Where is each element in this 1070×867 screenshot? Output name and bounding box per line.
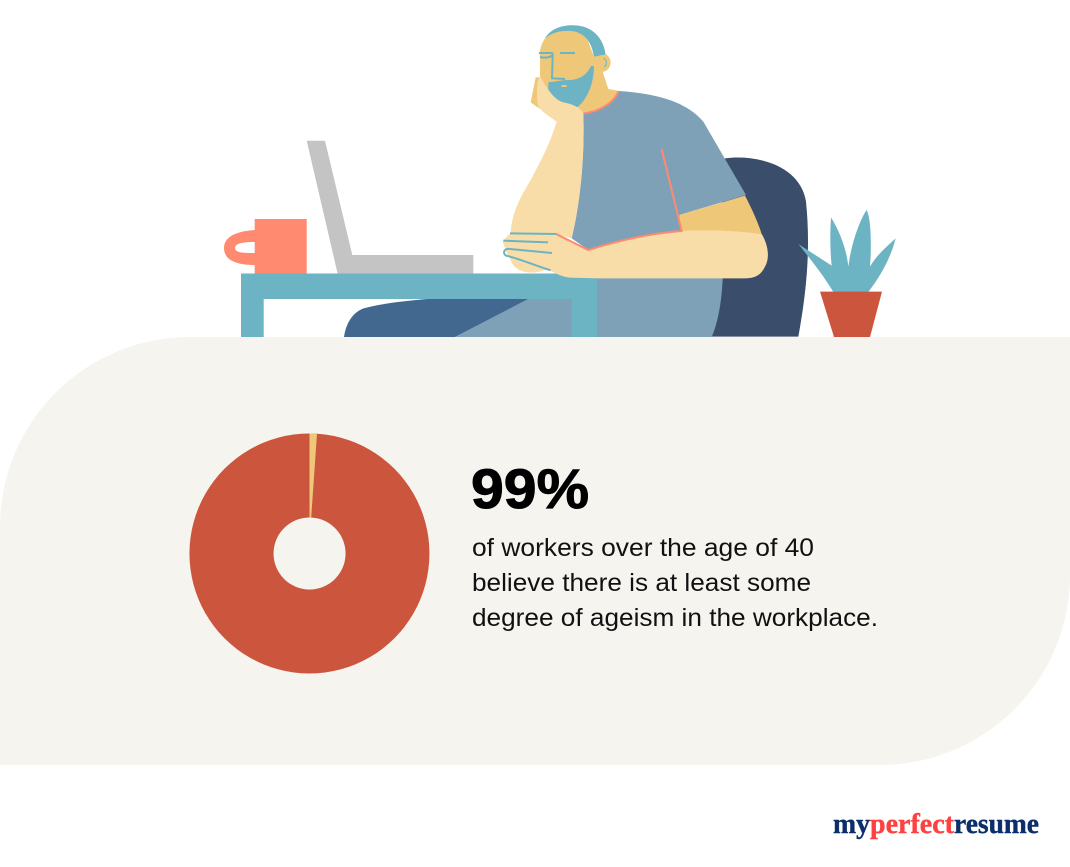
- finger lines: [503, 233, 557, 270]
- icon: coffee mug: [224, 219, 307, 274]
- illustration: man at desk: [224, 25, 896, 337]
- upper arm: [679, 196, 762, 234]
- shirt: [572, 91, 746, 250]
- pot: [820, 292, 882, 337]
- man: lower torso: [590, 270, 723, 337]
- head and neck: [540, 28, 619, 114]
- stat description: believe there is at least some: [472, 569, 811, 597]
- front forearm and hand: [503, 230, 768, 278]
- donut chart: 99 percent: [189, 433, 429, 674]
- leaves: [798, 210, 896, 292]
- icon: laptop: [307, 141, 473, 274]
- panel: stat background: [0, 337, 1070, 765]
- thumb shadow: [531, 77, 540, 109]
- shirt collar: [583, 91, 618, 113]
- mouth: [562, 83, 567, 89]
- man: figure: [503, 25, 768, 278]
- stat value: 99%: [471, 457, 589, 520]
- stat description: of workers over the age of 40: [472, 534, 814, 562]
- logo: myperfectresume: resume: [954, 809, 1039, 840]
- beard: [548, 66, 594, 107]
- man: trouser leg: [344, 299, 530, 337]
- icon: office chair: [712, 158, 808, 337]
- chart slice: remaining 1 percent: [310, 433, 317, 518]
- raised arm: [511, 76, 584, 238]
- stat description: degree of ageism in the workplace.: [472, 604, 878, 632]
- logo: myperfectresume: my: [833, 809, 870, 840]
- stat description: [472, 534, 878, 632]
- icon: desk: [241, 274, 597, 337]
- icon: potted plant: [798, 210, 896, 337]
- sleeve edge lines: [557, 149, 682, 250]
- man: lower shirt under desk: [455, 299, 575, 337]
- logo: myperfectresume: [833, 809, 1039, 840]
- logo: myperfectresume: perfect: [870, 809, 955, 840]
- face lines: [539, 53, 606, 79]
- hair: [545, 25, 606, 57]
